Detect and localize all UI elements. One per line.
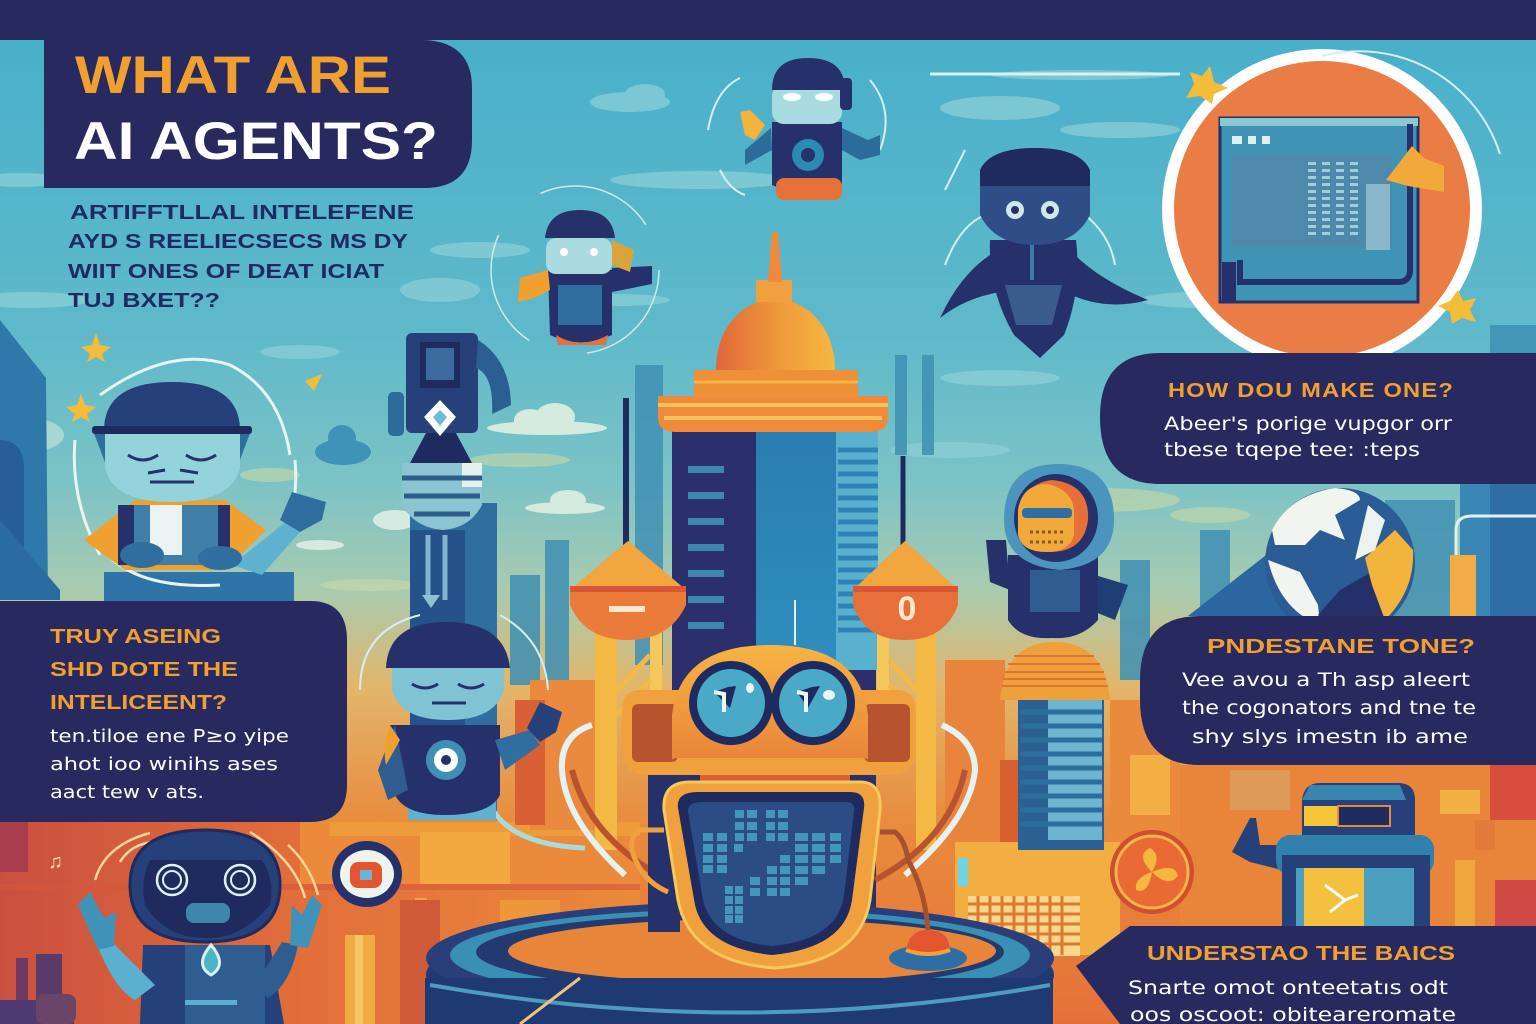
base platform [426,913,1054,1024]
city skyline: warm buildings [0,660,1536,1024]
icon: music note: ♫ [48,851,63,873]
red button [889,945,967,971]
small orange towers [570,398,958,850]
robot: astronaut [986,464,1128,638]
icon: circle window [1162,49,1500,369]
panel: truly asking: TRUY ASEING [50,626,221,648]
city skyline: left dark tower [0,320,294,602]
intro text: ARTIFFTLLAL INTELEFENE [70,202,414,224]
robot: small with tools [491,186,659,354]
robot: dark flying [940,148,1148,358]
icon: globe [1265,488,1415,638]
clouds [0,29,1430,458]
panel: truly asking: INTELICEENT? [50,692,227,714]
intro text: WIIT ONES OF DEAT ICIAT [68,261,384,283]
panel: truly asking: SHD DOTE THE [50,659,238,681]
title line 1: WHAT ARE [75,46,391,105]
body screen [664,782,880,968]
icon: star top [1186,66,1228,104]
tower roof [658,396,888,432]
decorative line [930,72,1180,76]
robot: machine right [1232,783,1434,926]
city skyline: far blue [510,325,1536,685]
robot: bottom left [78,830,322,1024]
title line 2: AI AGENTS? [74,112,438,171]
panel: truly asking [0,601,347,822]
intro text: AYD S REELIECSECS MS DY [68,231,409,253]
robot: sleeping center-left [360,615,585,848]
arms [562,725,625,875]
right dome building [1000,642,1110,850]
head [622,690,916,775]
icon: star right [1438,290,1476,324]
bottom-left mini skyline [0,954,76,1024]
panel: truly asking: aact tew v ats. [50,782,204,803]
neck [648,775,680,932]
panel: understand tone: shy slys imestn ib ame [1192,726,1468,748]
panel: understand the basics: UNDERSTAO THE BAICS [1147,943,1455,965]
left antenna tower [388,333,511,820]
white and tinted clouds [0,403,1250,591]
panel: understand tone [1140,616,1536,765]
hand loops [632,830,668,892]
grid building [955,842,1120,956]
intro text [68,202,414,312]
robot: main central [425,645,1054,1024]
top bar [0,0,1536,40]
robot: sleeping left [74,359,326,586]
panel: how do you make one: HOW DOU MAKE ONE? [1168,380,1454,402]
yellow pipe right [1450,516,1536,616]
panel: understand tone: the cogonators and tne te [1182,697,1476,719]
panel: understand tone: Vee avou a Th asp aleert [1182,669,1470,691]
intro text: TUJ BXET?? [68,290,220,312]
panel: understand the basics: Snarte omot onteetatıs odt [1128,977,1448,999]
panel: how do you make one: Abeer's porige vupgor orr [1164,413,1452,435]
central tower [658,232,888,930]
small orange towers: 0 [898,590,916,628]
icon: left stars [66,333,322,422]
panel: understand tone: PNDESTANE TONE? [1207,636,1475,658]
panel: truly asking: ten.tiloe ene P≥o yipe [50,726,289,747]
icon: round badge [332,841,402,907]
panel: how do you make one [1100,353,1536,484]
title panel [44,40,472,188]
icon: fan medallion [1110,830,1194,914]
right side tower block [1188,484,1536,620]
panel: how do you make one: tbese tqepe tee: :teps [1164,439,1420,461]
panel: understand the basics [1076,926,1536,1024]
robot: floating top [708,58,886,200]
panel: truly asking: ahot ioo winihs ases [50,754,278,775]
